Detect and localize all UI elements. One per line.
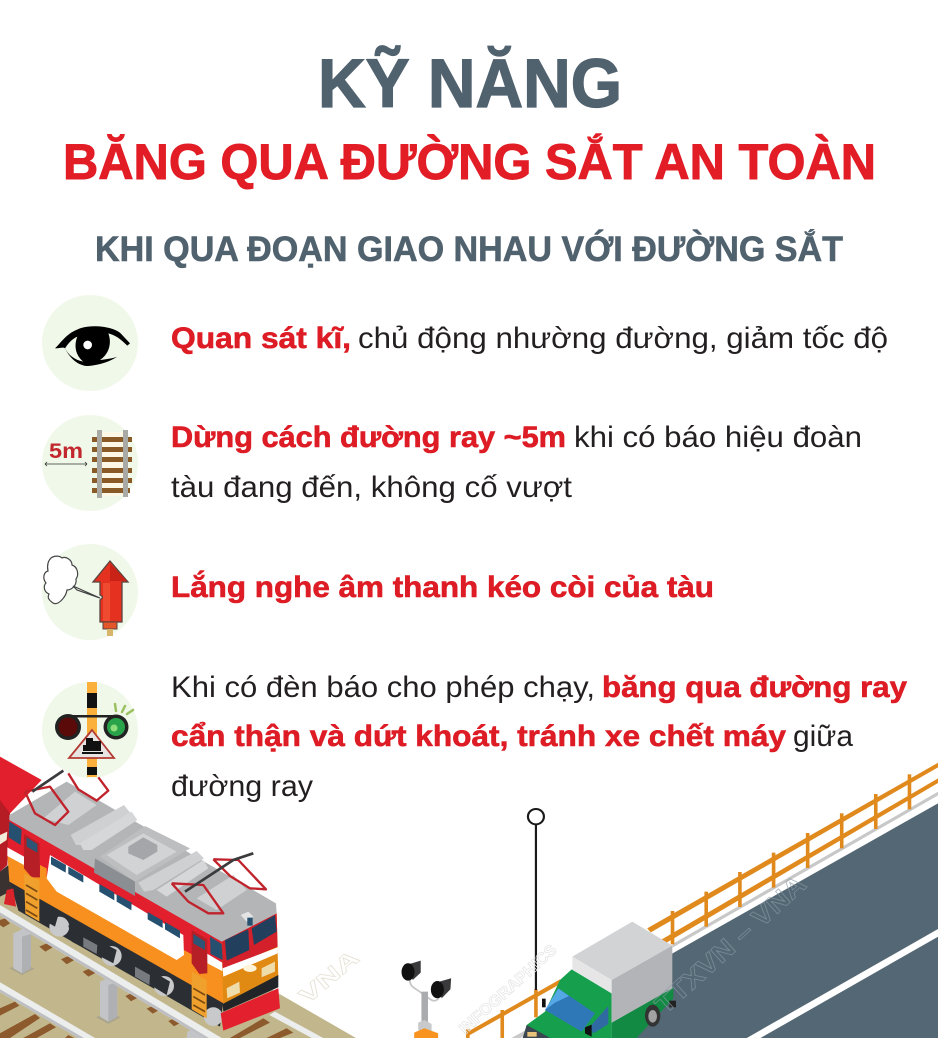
- text: stop 5 metres from the rails: khi có báo hiệu đoàn: [574, 421, 862, 454]
- lane marking: [747, 929, 938, 1038]
- road surface: [634, 803, 938, 1038]
- locomotive undercarriage: [4, 882, 223, 1027]
- fence: [466, 763, 938, 1038]
- signal pole: [528, 809, 544, 990]
- kerb line: [673, 792, 938, 948]
- side window: [589, 1006, 608, 1033]
- text: listen for the horn: Lắng nghe âm thanh kéo còi của tàu: [171, 570, 714, 604]
- doors and ladders: [24, 834, 207, 1018]
- watermark on road: TTXVN – VNA: [649, 869, 812, 1019]
- watermark: VNA: VNA: [294, 945, 364, 1009]
- text: stop 5 metres from the rails: Dừng cách đường ray ~5m: [171, 421, 566, 454]
- icon: 5m track: 5m: [49, 440, 83, 463]
- truck front and mirrors: [523, 999, 676, 1038]
- locomotive roof: [9, 782, 277, 942]
- heading: BĂNG QUA ĐƯỜNG SẮT AN TOÀN: BĂNG QUA ĐƯỜNG SẮT AN TOÀN: [63, 134, 876, 190]
- icon: 5m track: [42, 415, 138, 511]
- cargo box: [572, 922, 672, 1023]
- icon: train horn: [42, 544, 138, 640]
- text: stop 5 metres from the rails: [171, 421, 862, 504]
- locomotive front: [210, 913, 280, 1031]
- truck cab: [523, 969, 612, 1038]
- pillars: [9, 929, 204, 1038]
- text: stop 5 metres from the rails: tàu đang đến, không cố vượt: [171, 471, 573, 504]
- illustration: locomotive on elevated track: [0, 757, 356, 1038]
- text: cross decisively when signal allows: [171, 671, 907, 803]
- text: cross decisively when signal allows: Khi có đèn báo cho phép chạy,: [171, 671, 595, 704]
- pantograph bars: [32, 771, 253, 892]
- illustration: truck: [523, 922, 676, 1038]
- lower rail: [0, 982, 95, 1038]
- text: cross decisively when signal allows: cẩn thận và dứt khoát, tránh xe chết máy: [171, 720, 786, 753]
- sleepers: [0, 918, 293, 1038]
- text: observe carefully: Quan sát kĩ,: [171, 322, 351, 355]
- icon: crossing signal: [42, 682, 138, 778]
- wheel: [645, 1005, 660, 1027]
- pantographs: [25, 773, 266, 913]
- watermark: infographics: INFOGRAPHICS: [456, 941, 561, 1038]
- red carriage: [0, 757, 42, 897]
- text: cross decisively when signal allows: giữa: [793, 720, 853, 753]
- subheading: KHI QUA ĐOẠN GIAO NHAU VỚI ĐƯỜNG SẮT: [95, 229, 843, 269]
- text: cross decisively when signal allows: đường ray: [171, 770, 313, 803]
- kerb line lower left: [511, 1012, 560, 1038]
- text: cross decisively when signal allows: băng qua đường ray: [602, 671, 907, 704]
- text: observe carefully: chủ động nhường đường, giảm tốc độ: [358, 322, 888, 355]
- illustration: road and fence: [402, 763, 938, 1038]
- truck lower side: [612, 987, 673, 1038]
- locomotive body side: [7, 818, 224, 1003]
- warning speakers: [402, 961, 451, 1038]
- side windows: [9, 822, 180, 938]
- windshield: [545, 988, 595, 1032]
- ground: [0, 883, 356, 1038]
- icon: eye: [42, 295, 138, 391]
- upper rail: [0, 905, 323, 1038]
- title: KỸ NĂNG: KỸ NĂNG: [318, 45, 622, 122]
